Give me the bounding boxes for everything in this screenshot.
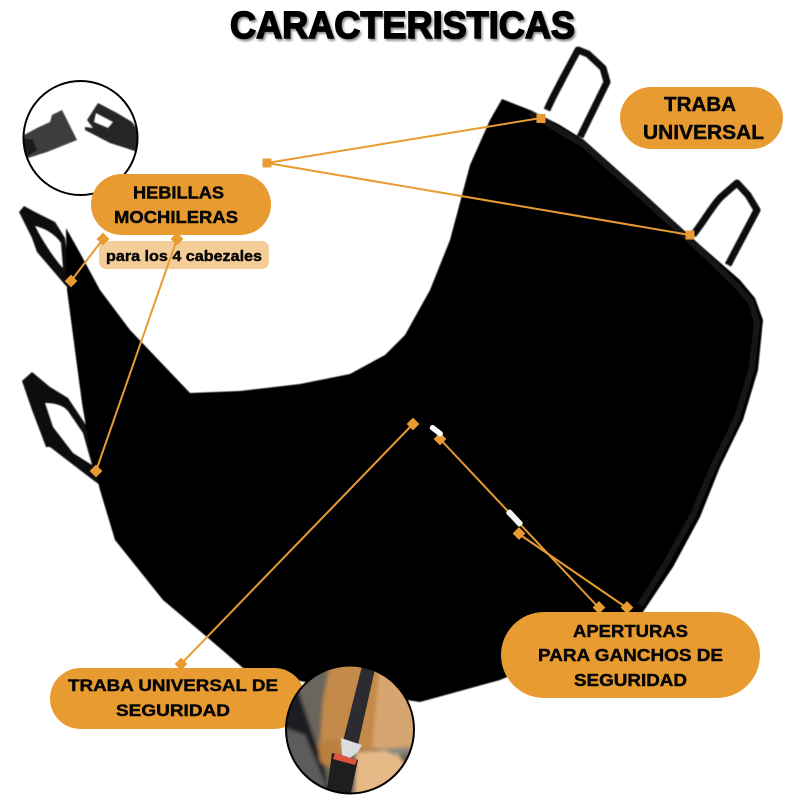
title: CARACTERISTICAS [230,5,575,47]
label: traba universal de seguridad: SEGURIDAD [116,701,230,720]
label: aperturas para ganchos de seguridad: SEGURIDAD [574,670,687,690]
callout line: traba universal de seguridad [175,418,419,670]
label: traba universal: TRABA [664,94,736,116]
label: aperturas para ganchos de seguridad: PARA GANCHOS DE [538,645,723,665]
strap: upper right loop 2 [693,183,757,265]
callout lines: aperturas [434,433,633,614]
sublabel: para los 4 cabezales [99,241,269,269]
callout lines: traba universal [262,114,694,240]
strap: left loop 2 [22,372,100,485]
callout lines: hebillas mochileras [65,233,183,477]
label: traba universal de seguridad: TRABA UNIVERSAL DE [68,676,278,695]
label: hebillas mochileras: MOCHILERAS [114,207,238,227]
photo circle: dog with seat belt [285,666,415,794]
belt buckle [327,753,358,792]
label: traba universal [620,87,783,149]
buckle male part [85,103,138,152]
seat cover product silhouette [19,50,763,702]
dog fur [320,664,362,760]
strap: left loop 1 [19,206,72,288]
cover hem shading [530,113,757,605]
slit: seat hook opening lower [505,509,524,527]
slit: seat hook opening upper [429,424,444,437]
label: hebillas mochileras [91,174,271,235]
seat background [297,670,408,792]
label: aperturas para ganchos de seguridad [501,612,760,698]
strap: upper right loop 1 [547,50,607,137]
label: hebillas mochileras: HEBILLAS [133,182,224,202]
cover body [66,99,763,702]
title: CARACTERISTICAS [232,7,576,49]
seat belt strap [343,666,375,745]
buckle female part [24,110,77,158]
label: aperturas para ganchos de seguridad: APERTURAS [573,621,688,641]
belt tongue [341,738,362,758]
photo circle: buckle [24,81,138,195]
label: traba universal: UNIVERSAL [643,122,764,144]
label: traba universal de seguridad [50,668,305,729]
sublabel: para los 4 cabezales: para los 4 cabezales [106,248,262,265]
